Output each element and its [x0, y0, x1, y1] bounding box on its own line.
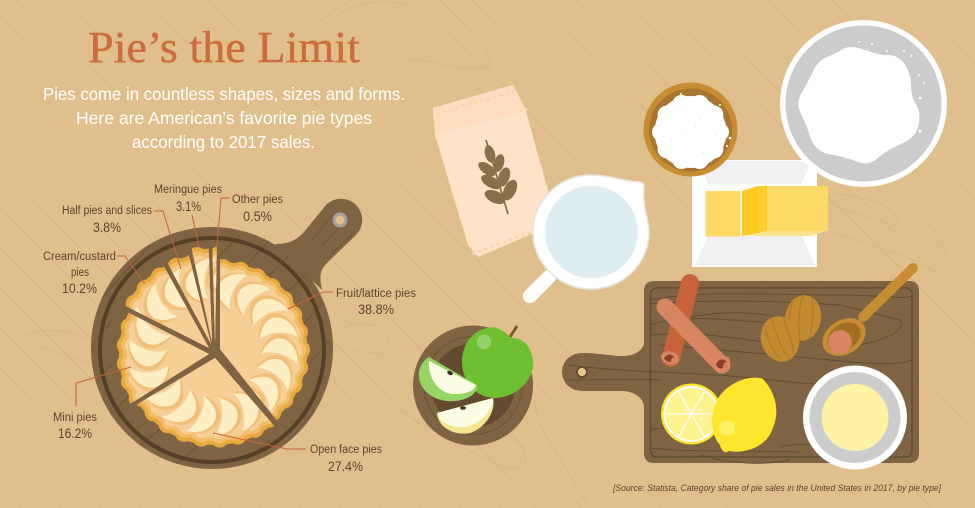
leader lines — [76, 198, 333, 449]
icon: apple wedge — [437, 398, 493, 434]
label: half pies: Half pies and slices — [62, 205, 152, 217]
small bowl of sugar — [644, 82, 738, 176]
intro text: according to 2017 sales. — [132, 132, 315, 152]
label: mini: Mini pies — [53, 412, 97, 424]
title: Pie’s the Limit — [88, 23, 360, 72]
icon: cinnamon sticks — [660, 283, 733, 375]
label: fruit/lattice: Fruit/lattice pies — [336, 288, 416, 300]
label: cream/custard: pies — [71, 267, 89, 279]
icon: bowl of butter — [803, 366, 907, 470]
label: open face: Open face pies — [310, 444, 382, 456]
label: open face: 27.4% — [328, 458, 363, 474]
slice: open face — [136, 358, 274, 448]
slice: fruit/lattice — [220, 259, 310, 420]
label: other — [232, 194, 283, 224]
slice: meringue — [192, 247, 212, 342]
label: mini — [53, 412, 97, 441]
label: half pies — [62, 205, 152, 235]
label: half pies: 3.8% — [93, 219, 121, 235]
label: other: Other pies — [232, 194, 283, 206]
icon: wheat — [476, 140, 520, 214]
milk jug — [530, 175, 649, 296]
icon: spice spoon — [815, 268, 913, 364]
label: mini: 16.2% — [58, 425, 92, 441]
slice: mini — [116, 312, 209, 404]
source note: [Source: Statista, Category share of pie sales in the United States in 2017, by pie type] — [612, 483, 941, 493]
serving board — [91, 199, 362, 469]
label: cream/custard — [43, 251, 116, 296]
intro text — [43, 84, 405, 152]
intro text: Here are American’s favorite pie types — [76, 108, 372, 128]
cutting board — [562, 268, 919, 470]
slice: other — [212, 246, 217, 343]
data labels — [43, 184, 416, 474]
icon: hanging hole — [577, 367, 587, 377]
icon: lemon slice — [661, 384, 722, 444]
icon: green apple — [462, 326, 533, 398]
icon: apple wedge with skin — [419, 357, 477, 401]
label: cream/custard: Cream/custard — [43, 251, 116, 263]
label: meringue: 3.1% — [176, 198, 201, 214]
slice: cream/custard — [126, 266, 209, 348]
label: fruit/lattice: 38.8% — [358, 301, 394, 317]
icon: walnuts — [756, 292, 825, 366]
slice: half pies and slices — [168, 254, 211, 344]
label: cream/custard: 10.2% — [62, 280, 97, 296]
icon: lemon — [712, 378, 776, 452]
label: meringue: Meringue pies — [154, 184, 222, 196]
label: meringue — [154, 184, 222, 214]
label: fruit/lattice — [336, 288, 416, 317]
apple bowl — [413, 326, 533, 446]
label: open face — [310, 444, 382, 474]
butter on paper — [692, 160, 828, 267]
flour bag — [433, 85, 552, 257]
pie chart on serving board — [43, 184, 416, 474]
intro text: Pies come in countless shapes, sizes and forms. — [43, 84, 405, 104]
big bowl of flour — [780, 20, 947, 187]
label: other: 0.5% — [243, 208, 272, 224]
